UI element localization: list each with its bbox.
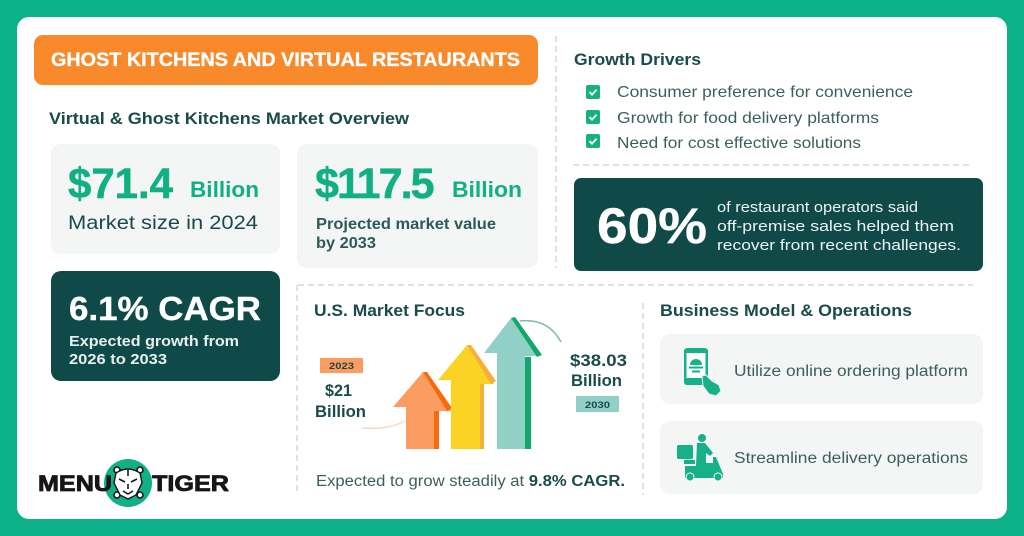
icon: phone ordering — [684, 348, 721, 396]
arrow: orange — [393, 372, 452, 449]
value: $38.03 Billion: Billion — [571, 371, 622, 390]
list: growth drivers — [586, 84, 913, 152]
panel: market size 2024 — [51, 144, 280, 254]
label: 2030 — [576, 396, 619, 412]
title banner: GHOST KITCHENS AND VIRTUAL RESTAURANTS — [51, 49, 520, 71]
label: 2023: 2023 — [329, 361, 354, 372]
heading: US market focus: U.S. Market Focus — [314, 301, 465, 320]
panel: 60% callout: off-premise sales helped them — [717, 218, 954, 235]
icon: delivery scooter — [677, 434, 723, 481]
panel: CAGR: Expected growth from — [69, 333, 239, 350]
value: $21 Billion: Billion — [315, 402, 366, 421]
heading: market overview: Virtual & Ghost Kitchens Market Overview — [49, 109, 410, 128]
panel: projected market value: Projected market value — [316, 216, 496, 233]
label: 2023 — [320, 358, 363, 373]
panel: online ordering — [660, 334, 983, 404]
panel: 60% callout: recover from recent challenges. — [717, 237, 961, 254]
driver: convenience: Consumer preference for convenience — [617, 84, 913, 101]
chart: growth arrows — [315, 317, 627, 449]
value: $38.03 Billion — [570, 351, 627, 390]
panel: delivery operations: Streamline delivery operations — [734, 450, 968, 467]
logo: MENU TIGER: MENU — [38, 471, 112, 496]
label: 2030: 2030 — [585, 400, 610, 411]
panel: 60% callout — [574, 178, 983, 271]
panel: delivery operations — [660, 421, 983, 494]
heading: business model: Business Model & Operations — [660, 301, 912, 320]
driver: delivery platforms: Growth for food delivery platforms — [617, 110, 879, 127]
panel: market size 2024: Market size in 2024 — [68, 212, 258, 234]
panel: projected market value — [297, 144, 538, 268]
panel: projected market value: $117.5 — [315, 160, 436, 208]
panel: 60% callout: 60% — [597, 198, 707, 254]
value: $21 Billion — [315, 381, 366, 421]
text: CAGR note: Expected to grow steadily at 9.8% CAGR. — [316, 473, 625, 490]
panel: CAGR: 2026 to 2033 — [69, 351, 167, 368]
panel: projected market value: by 2033 — [316, 235, 376, 252]
logo: MENU TIGER — [38, 459, 229, 507]
value: $38.03 Billion: $38.03 — [570, 351, 627, 370]
heading: growth drivers: Growth Drivers — [574, 50, 701, 69]
panel: CAGR — [51, 271, 280, 381]
panel: online ordering: Utilize online ordering platform — [734, 363, 968, 380]
panel: 60% callout: of restaurant operators said — [717, 199, 918, 216]
logo: MENU TIGER: TIGER — [152, 471, 229, 496]
arrow: yellow — [438, 345, 496, 449]
panel: market size 2024: $71.4 — [68, 160, 173, 208]
arrow: teal — [484, 317, 542, 449]
panel: projected market value: Billion — [452, 177, 522, 202]
panel: CAGR: 6.1% CAGR — [69, 290, 261, 327]
value: $21 Billion: $21 — [325, 381, 352, 400]
panel: market size 2024: Billion — [190, 177, 259, 202]
title banner — [34, 35, 538, 85]
driver: cost effective: Need for cost effective solutions — [617, 135, 861, 152]
